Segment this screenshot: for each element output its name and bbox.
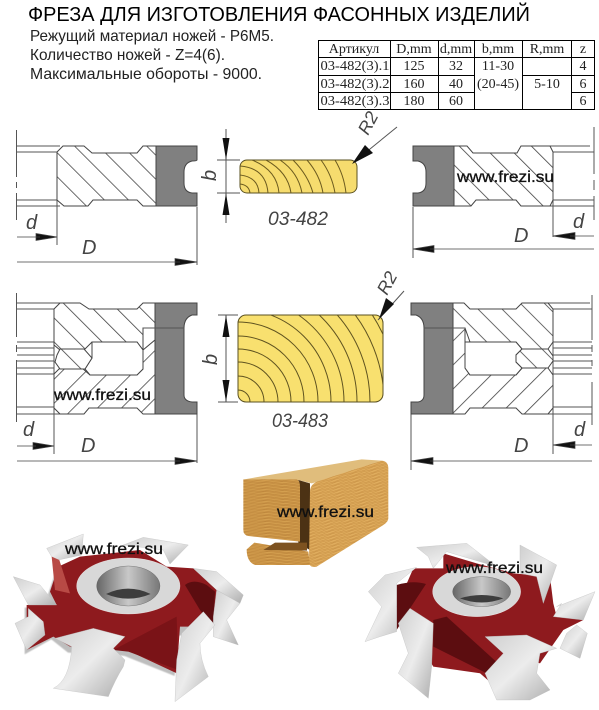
drawing: profile 03-482 — [199, 108, 397, 230]
specifications table: d,mm — [440, 42, 472, 57]
drawing: cutter 03-482 right section: d — [573, 211, 585, 233]
watermark: lower left drawing: www.frezi.su — [53, 387, 151, 404]
specifications table: z — [580, 42, 586, 57]
specifications table: b,mm — [482, 42, 514, 57]
title: ФРЕЗА ДЛЯ ИЗГОТОВЛЕНИЯ ФАСОННЫХ ИЗДЕЛИЙ — [28, 2, 530, 26]
specifications table: 60 — [449, 94, 463, 109]
specifications table: 11-30 — [482, 59, 514, 74]
drawing: cutter 03-482 left section: D — [82, 237, 96, 259]
drawing: profile 03-482: b — [199, 170, 221, 181]
specifications table: 03-482(3).3 — [320, 94, 390, 109]
drawing: profile 03-483: R2 — [373, 268, 401, 298]
photo: left cutter — [13, 534, 243, 702]
specifications table: 6 — [580, 94, 586, 109]
specifications table: (20-45) — [477, 77, 519, 92]
specifications table: D,mm — [396, 42, 432, 57]
specifications table: R,mm — [530, 42, 564, 57]
drawing: cutter 03-482 right section — [413, 127, 594, 258]
photo: right cutter — [365, 543, 595, 700]
watermark: top right drawing: www.frezi.su — [456, 169, 554, 186]
photo: wooden profile sample — [243, 459, 388, 567]
watermark: wood sample: www.frezi.su — [276, 504, 374, 521]
specifications text: Количество ножей - Z=4(6). — [30, 47, 225, 64]
drawing: cutter 03-482 left section: d — [26, 212, 38, 234]
drawing: cutter 03-483 right section — [411, 295, 592, 470]
specifications text — [30, 28, 274, 83]
specifications table: 180 — [404, 94, 424, 109]
specifications text: Максимальные обороты - 9000. — [30, 66, 262, 83]
drawing: profile 03-482: 03-482 — [268, 209, 328, 230]
drawing: profile 03-483 — [202, 271, 404, 427]
specifications table: 32 — [449, 59, 463, 74]
specifications table: 5-10 — [534, 77, 560, 92]
specifications table: 160 — [404, 77, 424, 92]
specifications table: 03-482(3).1 — [320, 59, 390, 74]
drawing: cutter 03-483 left section: D — [81, 435, 95, 457]
drawing: cutter 03-483 left section: d — [23, 419, 35, 441]
drawing: cutter 03-483 left section — [16, 293, 197, 464]
specifications table: Артикул — [329, 42, 379, 57]
specifications table — [318, 40, 595, 110]
specifications table: 125 — [404, 59, 424, 74]
drawing: profile 03-483: b — [200, 354, 222, 365]
drawing: profile 03-482: R2 — [354, 108, 382, 138]
drawing: profile 03-483: 03-483 — [272, 411, 328, 432]
watermark: left cutter: www.frezi.su — [64, 541, 163, 558]
drawing: cutter 03-483 right section: d — [574, 419, 586, 441]
specifications text: Режущий материал ножей - Р6М5. — [30, 28, 274, 45]
specifications table: 40 — [449, 77, 463, 92]
drawing: cutter 03-483 right section: D — [514, 435, 528, 457]
watermark: right cutter: www.frezi.su — [445, 560, 543, 577]
specifications table: 03-482(3).2 — [320, 77, 390, 92]
drawing: cutter 03-482 left section — [16, 130, 197, 266]
specifications table: 6 — [580, 77, 586, 92]
drawing: cutter 03-482 right section: D — [514, 225, 528, 247]
specifications table: 4 — [580, 59, 586, 74]
